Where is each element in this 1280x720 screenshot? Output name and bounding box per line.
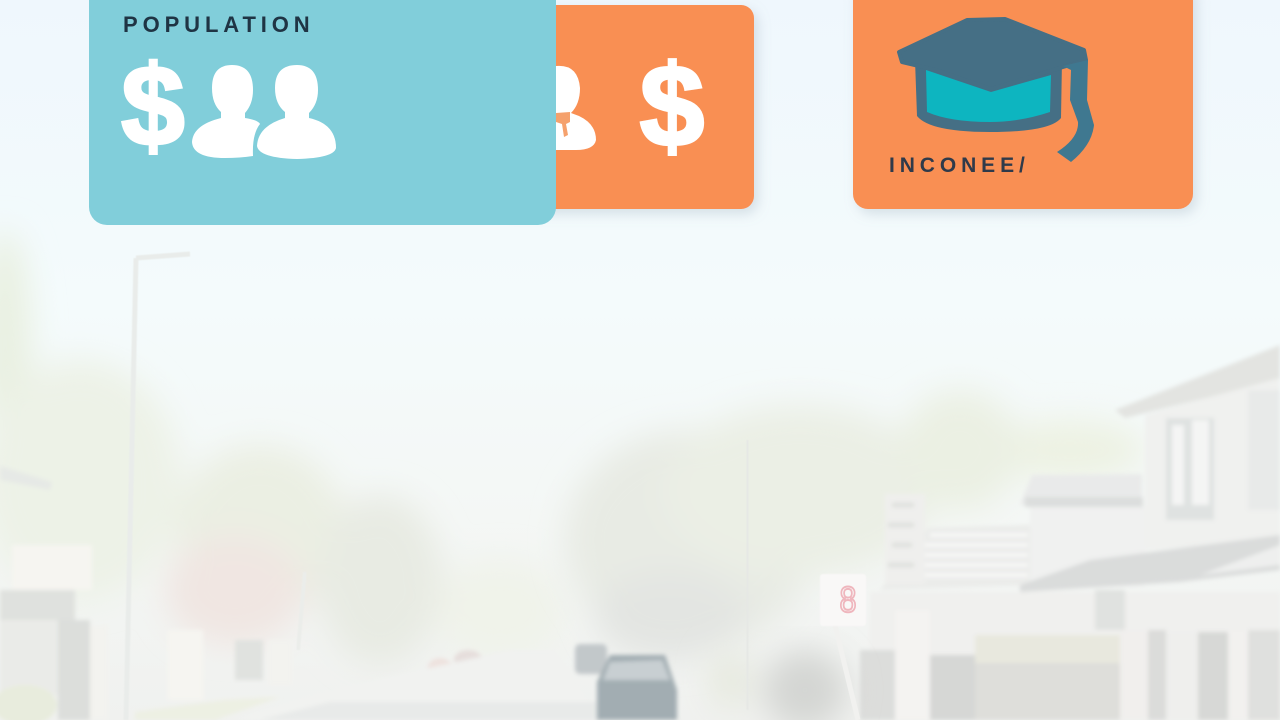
road	[230, 650, 600, 720]
icon: person with tie	[556, 66, 596, 150]
left trees	[0, 230, 565, 665]
panel: orange card behind	[500, 5, 754, 209]
panel: income card with graduation cap	[853, 0, 1193, 209]
pole and road sign	[747, 440, 748, 710]
lamp post	[126, 254, 190, 720]
background: hazy suburban street photo: 8	[840, 579, 856, 620]
icon: person	[257, 65, 336, 159]
panel: population card	[89, 0, 556, 225]
cars	[575, 644, 677, 720]
heading: population: POPULATION	[123, 12, 315, 37]
icon: graduation cap	[899, 19, 1094, 162]
icon: person	[192, 65, 260, 158]
icon: dollar sign: $	[640, 41, 704, 171]
icon: dollar sign: $	[121, 43, 185, 170]
centre-right trees	[565, 390, 1145, 660]
right houses	[860, 345, 1280, 720]
hedges	[710, 650, 847, 720]
left houses	[0, 466, 482, 720]
label: income: INCONEE/	[889, 154, 1030, 177]
